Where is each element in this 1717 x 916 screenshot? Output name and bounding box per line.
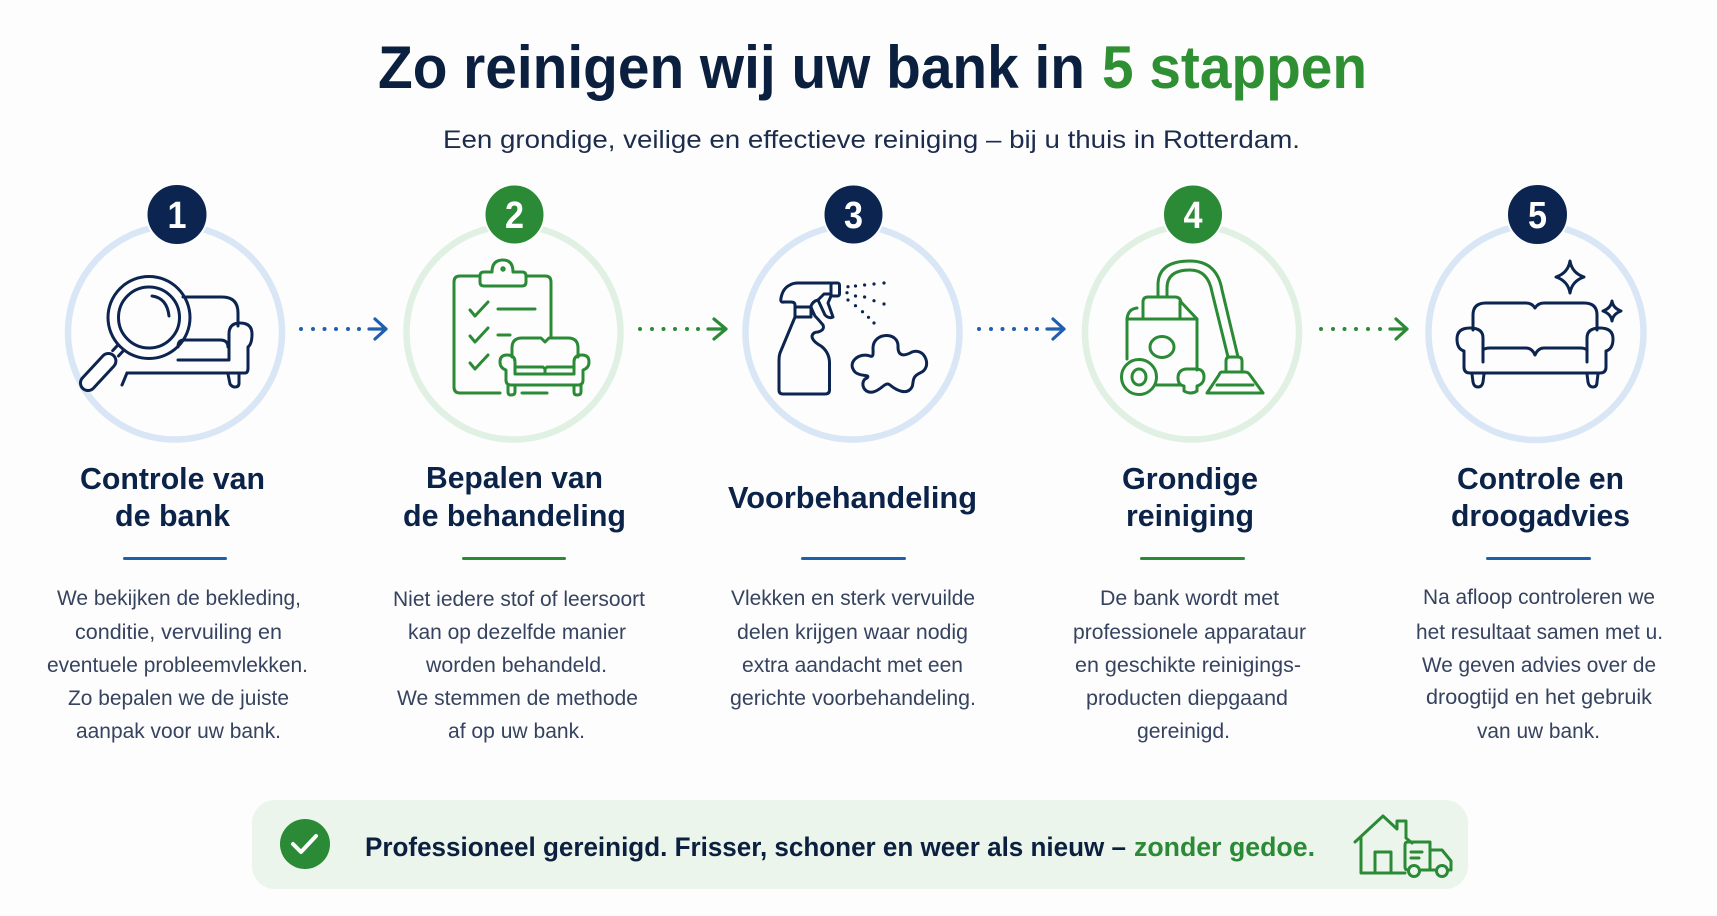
heading 2: de behandeling xyxy=(403,498,626,533)
heading 5: Controle en xyxy=(1457,461,1624,496)
badge 4: 4 xyxy=(1184,195,1202,237)
badge 2 xyxy=(484,184,544,244)
badge 2: 2 xyxy=(505,195,524,237)
body 2: Niet iedere stof of leersoort xyxy=(393,588,645,611)
step 4: Grondige reiniging xyxy=(1073,184,1306,743)
subtitle: Een grondige, veilige en effectieve reiniging – bij u thuis in Rotterdam. xyxy=(443,126,1300,154)
body 4: gereinigd. xyxy=(1137,720,1230,743)
step 3: Voorbehandeling xyxy=(728,184,977,710)
heading 1 xyxy=(80,461,265,533)
heading 2: Bepalen van xyxy=(426,460,603,495)
heading 5 xyxy=(1451,461,1630,533)
body 4: professionele apparataur xyxy=(1073,621,1306,644)
body 5: droogtijd en het gebruik xyxy=(1426,686,1652,709)
arrow 1 xyxy=(299,319,386,339)
icon: clean sofa with sparkles xyxy=(1457,261,1621,387)
body 5: van uw bank. xyxy=(1477,720,1600,743)
divider 1 xyxy=(123,557,227,560)
heading 2 xyxy=(403,460,626,533)
spray dots xyxy=(845,281,886,325)
title: Zo reinigen wij uw bank in xyxy=(378,34,1085,101)
banner xyxy=(252,800,1468,889)
body 4: en geschikte reinigings- xyxy=(1075,654,1301,677)
body 4 xyxy=(1073,587,1306,743)
heading 4 xyxy=(1122,461,1258,533)
arrow 4 xyxy=(1319,319,1407,339)
icon: check circle xyxy=(280,819,330,869)
step 2: Bepalen van de behandeling xyxy=(393,184,645,743)
body 2: af op uw bank. xyxy=(448,720,585,743)
step 5: Controle en droogadvies xyxy=(1416,184,1663,743)
ring 4 xyxy=(1085,226,1299,440)
banner text: Professioneel gereinigd. Frisser, schoner en weer als nieuw – xyxy=(365,832,1126,862)
body 1: aanpak voor uw bank. xyxy=(76,720,281,743)
body 3 xyxy=(730,587,976,710)
body 5: het resultaat samen met u. xyxy=(1416,621,1663,644)
heading 1: de bank xyxy=(115,498,231,533)
ring 2 xyxy=(406,226,620,440)
icon: spray bottle and stain xyxy=(779,281,927,394)
step 1: Controle van de bank xyxy=(47,184,308,743)
banner text: zonder gedoe. xyxy=(1134,832,1315,862)
badge 1 xyxy=(146,184,208,245)
divider 4 xyxy=(1140,557,1245,560)
icon: clipboard with sofa xyxy=(454,260,589,395)
divider 3 xyxy=(801,557,906,560)
arrow 2 xyxy=(638,319,726,339)
body 3: gerichte voorbehandeling. xyxy=(730,687,976,710)
ring 5 xyxy=(1428,225,1644,440)
body 2 xyxy=(393,588,645,743)
ring 1 xyxy=(68,226,282,440)
body 2: kan op dezelfde manier xyxy=(408,621,626,644)
body 3: delen krijgen waar nodig xyxy=(737,621,968,644)
body 2: worden behandeld. xyxy=(425,654,607,677)
badge 3: 3 xyxy=(844,195,863,237)
divider 2 xyxy=(462,557,566,560)
badge 1: 1 xyxy=(168,195,186,237)
body 4: De bank wordt met xyxy=(1100,587,1279,610)
icon: house and van xyxy=(1355,816,1451,876)
ring 3 xyxy=(746,226,960,440)
badge 5: 5 xyxy=(1528,195,1547,237)
badge 5 xyxy=(1507,184,1568,245)
heading 4: Grondige xyxy=(1122,461,1258,496)
body 1 xyxy=(47,587,308,743)
body 3: extra aandacht met een xyxy=(742,654,963,677)
body 1: eventuele probleemvlekken. xyxy=(47,654,308,677)
banner background xyxy=(252,800,1468,889)
heading 1: Controle van xyxy=(80,461,265,496)
body 5: Na afloop controleren we xyxy=(1423,586,1655,609)
body 1: conditie, vervuiling en xyxy=(75,621,282,644)
title: 5 stappen xyxy=(1102,34,1367,101)
body 4: producten diepgaand xyxy=(1086,687,1288,710)
body 1: Zo bepalen we de juiste xyxy=(68,687,289,710)
heading 4: reiniging xyxy=(1126,498,1254,533)
body 5 xyxy=(1416,586,1663,743)
body 5: We geven advies over de xyxy=(1422,654,1656,677)
badge 3 xyxy=(824,184,884,244)
divider 5 xyxy=(1486,557,1591,560)
body 3: Vlekken en sterk vervuilde xyxy=(731,587,975,610)
heading 5: droogadvies xyxy=(1451,498,1630,533)
heading 3: Voorbehandeling xyxy=(728,480,977,515)
body 2: We stemmen de methode xyxy=(397,687,638,710)
badge 4 xyxy=(1163,184,1223,244)
icon: vacuum cleaner xyxy=(1122,261,1263,394)
arrow 3 xyxy=(977,319,1064,339)
icon: magnifier over sofa xyxy=(81,276,252,390)
body 1: We bekijken de bekleding, xyxy=(57,587,301,610)
